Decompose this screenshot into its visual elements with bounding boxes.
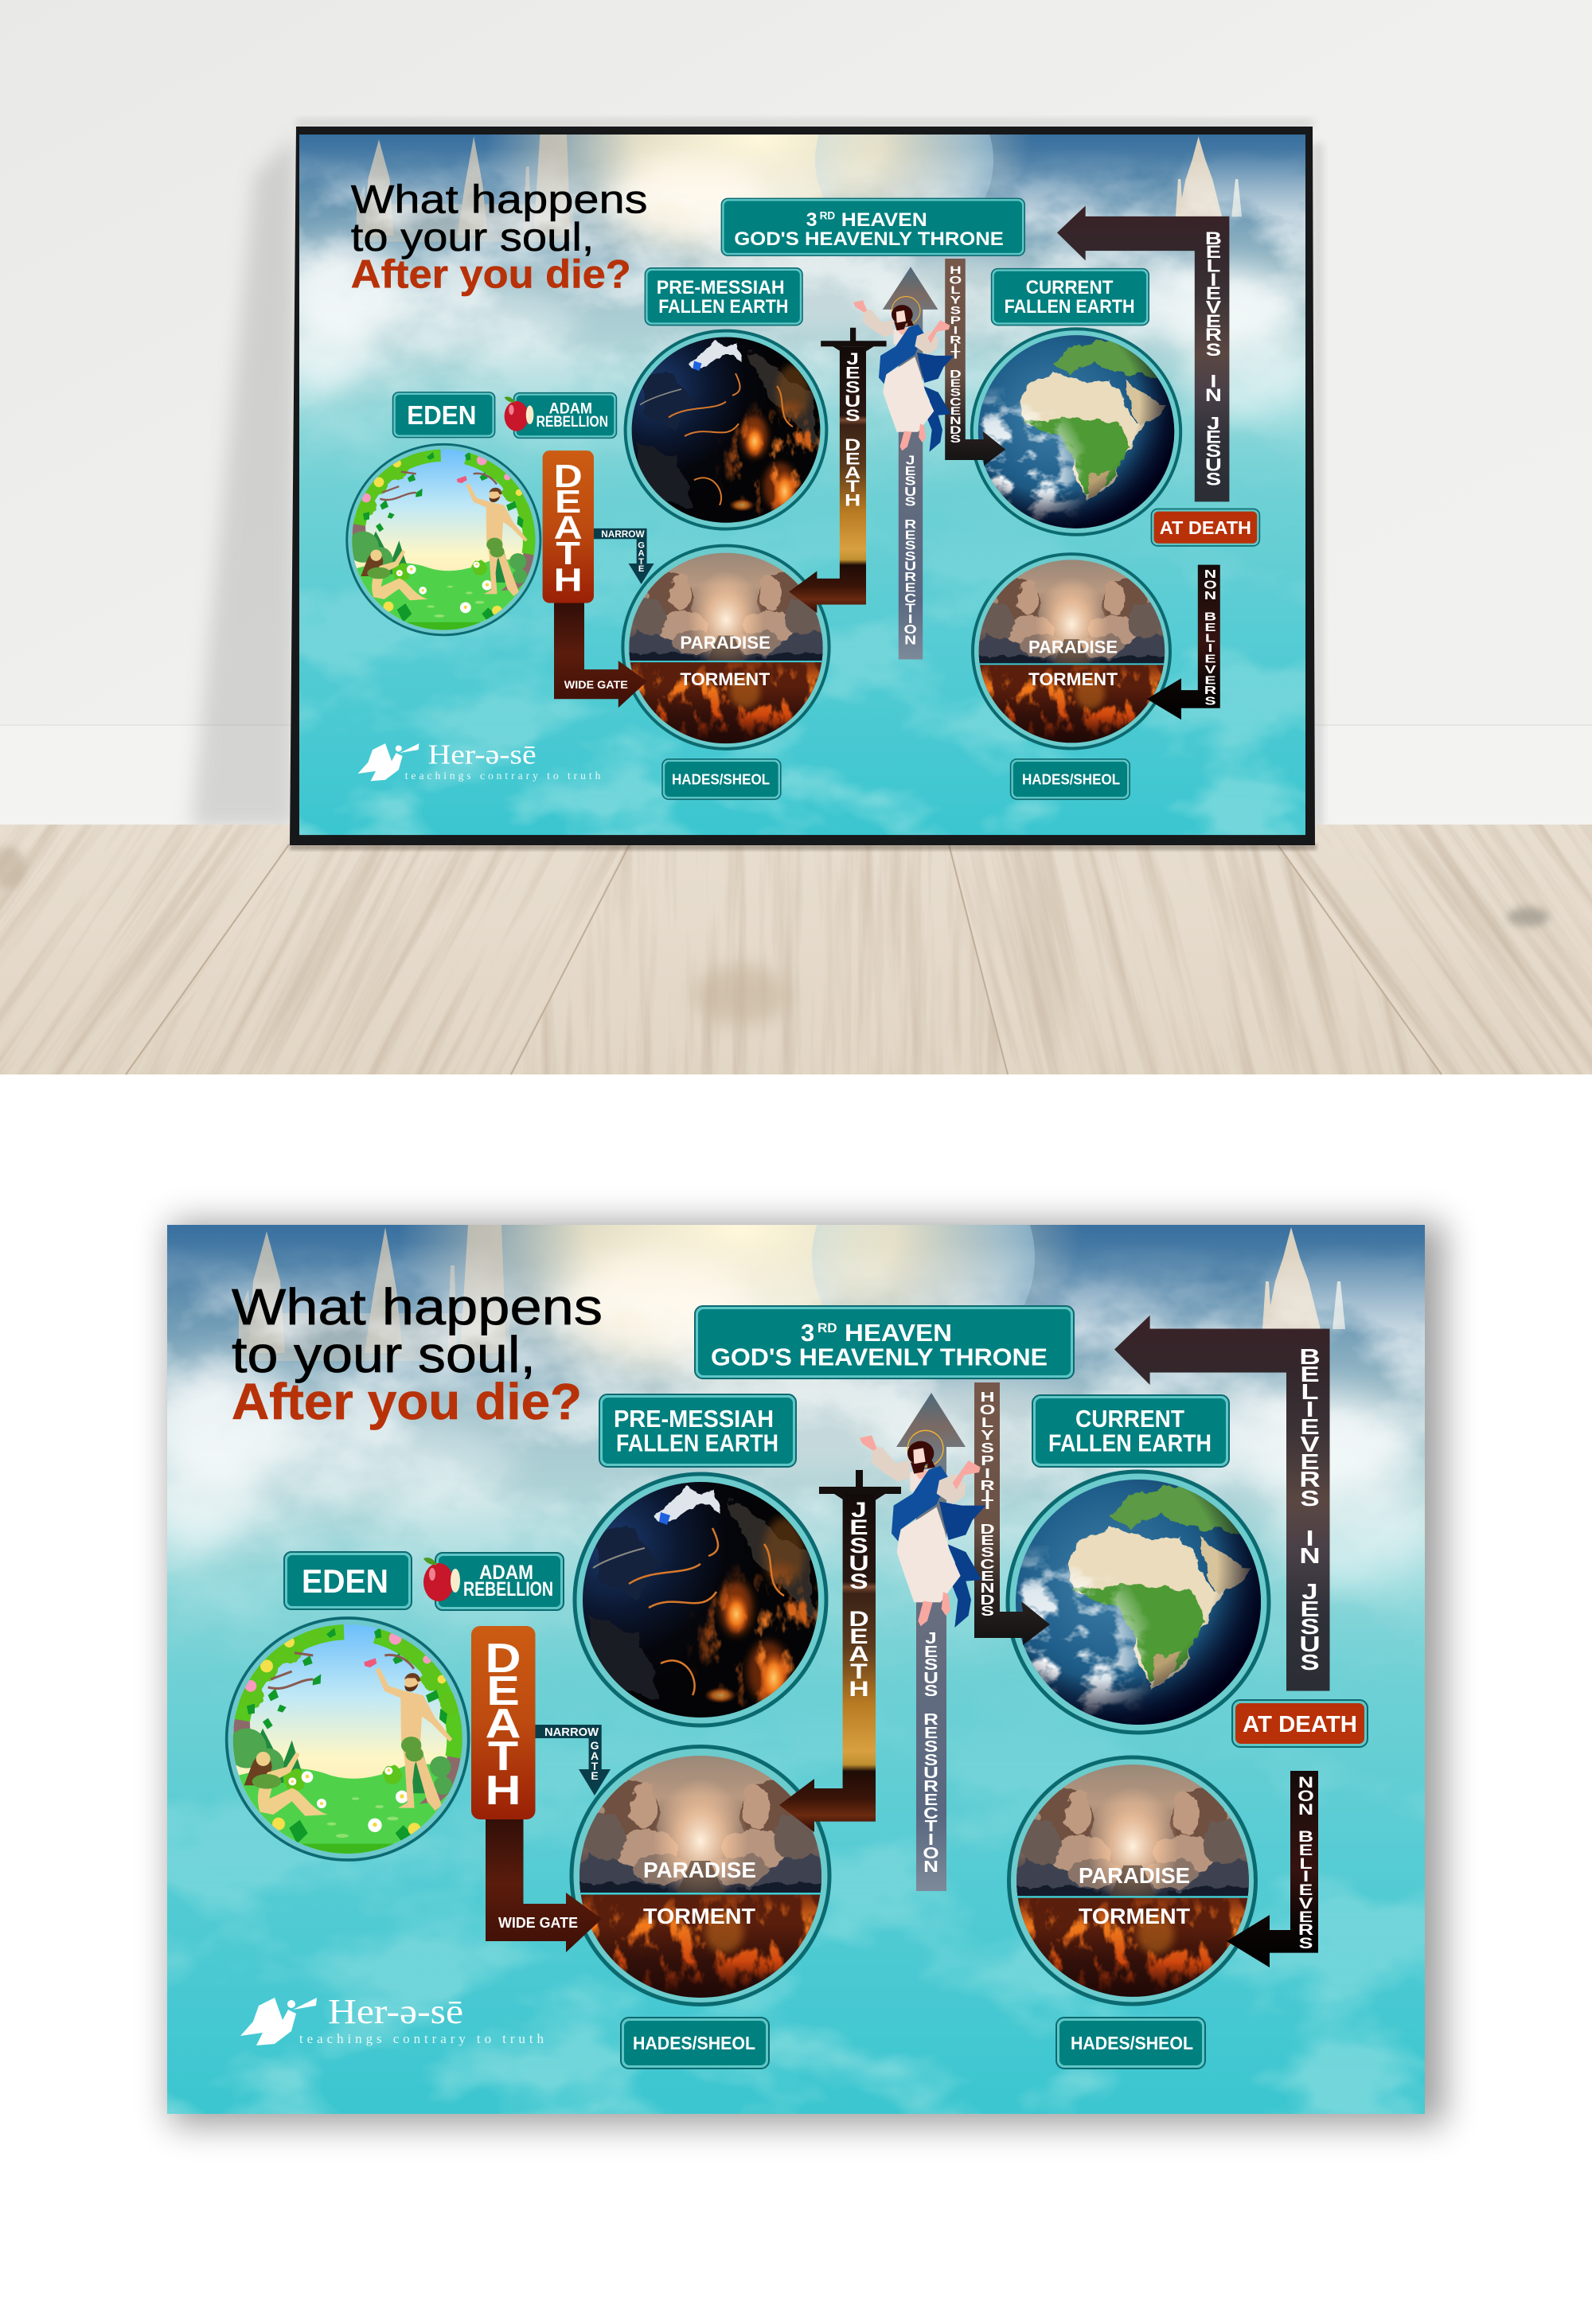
arrow: non believers: NON BELIEVERS	[1204, 567, 1217, 708]
label: current fallen earth: FALLEN EARTH	[1048, 1429, 1212, 1456]
arrow: holy spirit descends	[945, 259, 1005, 466]
label: 3rd heaven: GOD'S HEAVENLY THRONE	[711, 1343, 1048, 1371]
label: hades sheol right	[1011, 759, 1130, 799]
label: at death: AT DEATH	[1160, 517, 1251, 538]
label: eden	[284, 1552, 412, 1609]
logo	[240, 1992, 544, 2046]
label: adam rebellion	[435, 1553, 564, 1610]
circle: hades right: TORMENT	[1028, 669, 1118, 689]
label: 3rd heaven: RD	[820, 209, 835, 221]
label: hades sheol left	[662, 759, 781, 799]
circle: hades left: PARADISE	[680, 633, 771, 653]
arrow: jesus death	[789, 328, 887, 613]
logo: Her-ə-sē	[328, 1992, 463, 2031]
label: adam rebellion: REBELLION	[463, 1578, 553, 1601]
arrow: holy spirit descends	[974, 1382, 1050, 1645]
circle: hades right	[1007, 1757, 1258, 2004]
label: hades sheol left: HADES/SHEOL	[633, 2033, 755, 2053]
title: to your soul,	[351, 214, 594, 259]
icon: bitten apple	[505, 396, 533, 431]
label: 3rd heaven: GOD'S HEAVENLY THRONE	[734, 228, 1004, 250]
circle: hades left: PARADISE	[643, 1858, 756, 1882]
arrow: believers in jesus: BELIEVERS IN JESUS	[1205, 229, 1222, 489]
logo: teachings contrary to truth	[299, 2031, 544, 2046]
label: hades sheol right: HADES/SHEOL	[1022, 770, 1120, 787]
figure: risen jesus	[853, 297, 954, 452]
label: current fallen earth	[1032, 1395, 1229, 1467]
circle: hades right: TORMENT	[1079, 1904, 1190, 1928]
label: 3rd heaven: 3	[801, 1319, 814, 1347]
arrow: wide gate: WIDE GATE	[498, 1915, 578, 1931]
label: at death	[1151, 509, 1259, 546]
label: adam rebellion: ADAM	[549, 400, 592, 418]
arrow: narrow gate: GATE	[591, 1739, 599, 1782]
label: current fallen earth: FALLEN EARTH	[1005, 296, 1135, 318]
arrow: believers in jesus	[1114, 1316, 1329, 1690]
label: pre-messiah fallen earth: PRE-MESSIAH	[657, 277, 785, 298]
arrow: believers in jesus	[1057, 206, 1229, 501]
circle: eden garden	[227, 1618, 469, 1860]
arrow: jesus resurrection: JESUS RESSURECTION	[904, 453, 917, 647]
label: pre-messiah fallen earth	[599, 1394, 796, 1467]
arrow: believers in jesus: BELIEVERS IN JESUS	[1299, 1344, 1321, 1675]
arrow: narrow gate: NARROW	[544, 1725, 599, 1739]
arrow: jesus resurrection: JESUS RESSURECTION	[923, 1629, 939, 1875]
arrow: narrow gate: NARROW	[601, 528, 645, 540]
arrow: holy spirit descends: HOLYSPIRIT DESCENDS	[980, 1389, 995, 1619]
arrow: narrow gate: GATE	[638, 540, 645, 574]
circle: hades left: TORMENT	[643, 1904, 755, 1928]
arrow: wide gate	[554, 599, 647, 708]
title: What happens	[232, 1278, 603, 1336]
label: eden	[393, 392, 495, 438]
label: 3rd heaven	[721, 198, 1024, 255]
label: adam rebellion: ADAM	[479, 1562, 533, 1584]
label: eden: EDEN	[302, 1562, 388, 1600]
title: What happens	[351, 177, 648, 221]
arrow: non believers	[1147, 565, 1220, 719]
arrow: jesus death: JESUS DEATH	[845, 349, 860, 510]
logo: teachings contrary to truth	[405, 770, 601, 782]
arrow: narrow gate	[533, 1725, 611, 1796]
label: eden: EDEN	[407, 401, 476, 431]
title	[232, 1278, 603, 1430]
icon: bitten apple	[423, 1558, 460, 1601]
arrow: wide gate	[486, 1815, 602, 1952]
mockup: framed poster	[287, 0, 1312, 835]
label: 3rd heaven: HEAVEN	[841, 209, 927, 231]
title	[351, 177, 648, 296]
label: hades sheol right: HADES/SHEOL	[1071, 2033, 1193, 2053]
label: at death	[1232, 1700, 1368, 1747]
arrow: jesus death: JESUS DEATH	[849, 1498, 869, 1701]
label: hades sheol right	[1056, 2018, 1205, 2069]
label: 3rd heaven	[695, 1306, 1074, 1378]
label: current fallen earth: CURRENT	[1026, 277, 1113, 298]
label: 3rd heaven: HEAVEN	[845, 1319, 952, 1347]
circle: hades left	[621, 546, 831, 749]
bar: death: DEATH	[485, 1636, 521, 1814]
circle: hades right	[971, 554, 1173, 748]
label: hades sheol left: HADES/SHEOL	[672, 770, 770, 787]
poster shadow	[170, 1222, 1444, 2125]
arrow: jesus resurrection	[883, 267, 938, 660]
circle: hades right: PARADISE	[1028, 638, 1118, 657]
arrow: jesus resurrection	[896, 1393, 966, 1891]
circle: pre-messiah burning earth	[626, 331, 826, 529]
label: adam rebellion: REBELLION	[537, 413, 608, 431]
circle: hades left: TORMENT	[680, 669, 771, 689]
bar: death: DEATH	[554, 458, 583, 599]
label: hades sheol left	[621, 2018, 769, 2069]
arrow: wide gate: WIDE GATE	[564, 679, 628, 692]
label: pre-messiah fallen earth: FALLEN EARTH	[616, 1429, 778, 1456]
circle: pre-messiah burning earth	[575, 1474, 826, 1725]
logo: Her-ə-sē	[428, 739, 537, 770]
mockup: black frame	[290, 127, 1315, 845]
label: 3rd heaven: 3	[806, 209, 817, 231]
label: current fallen earth	[992, 269, 1149, 326]
figure: risen jesus	[860, 1430, 985, 1628]
label: pre-messiah fallen earth	[645, 268, 802, 326]
arrow: jesus death	[779, 1470, 901, 1832]
logo	[358, 739, 601, 782]
label: pre-messiah fallen earth: FALLEN EARTH	[658, 296, 788, 318]
mockup: room scene	[0, 0, 1592, 1074]
bar: death	[543, 450, 594, 603]
bar: death	[471, 1626, 535, 1819]
arrow: holy spirit descends: HOLYSPIRIT DESCENDS	[950, 263, 962, 445]
label: 3rd heaven: RD	[817, 1320, 837, 1336]
title: After you die?	[232, 1373, 582, 1430]
circle: hades left	[569, 1746, 832, 2004]
label: current fallen earth: CURRENT	[1075, 1405, 1184, 1433]
label: pre-messiah fallen earth: PRE-MESSIAH	[614, 1405, 774, 1433]
label: adam rebellion	[514, 393, 616, 438]
arrow: non believers	[1227, 1771, 1318, 1967]
arrow: non believers: NON BELIEVERS	[1297, 1774, 1314, 1952]
title: to your soul,	[232, 1326, 536, 1383]
label: at death: AT DEATH	[1243, 1712, 1357, 1737]
main poster	[151, 1047, 1433, 2114]
title: After you die?	[351, 252, 631, 296]
circle: current earth	[1008, 1472, 1269, 1733]
circle: current earth	[972, 329, 1180, 535]
circle: hades right: PARADISE	[1079, 1863, 1190, 1888]
circle: eden garden	[347, 444, 540, 635]
arrow: narrow gate	[592, 528, 654, 584]
